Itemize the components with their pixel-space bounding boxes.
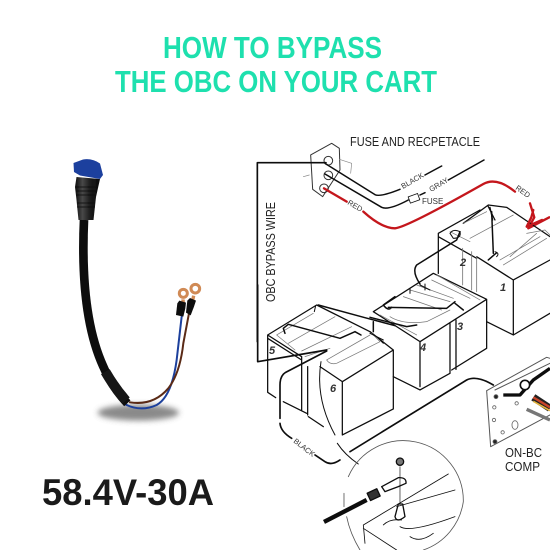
upper wiring [257, 143, 550, 342]
battery numbers: 4 [419, 342, 426, 354]
battery top ribs [380, 212, 550, 335]
ring terminals [176, 284, 200, 317]
battery terminal detail [363, 474, 455, 550]
battery numbers [269, 257, 506, 395]
black wire [325, 163, 442, 195]
wiring diagram [257, 135, 550, 550]
strain relief [105, 372, 126, 401]
detail circle [344, 441, 463, 550]
battery 5 outline [268, 305, 370, 415]
label: on-board computer [505, 446, 542, 474]
battery 1 and 2 back edge [463, 205, 550, 237]
connector [74, 159, 103, 220]
black cable in detail [324, 500, 367, 522]
lead to detail circle end [337, 443, 358, 464]
gray wire with fuse [325, 160, 484, 208]
terminals on battery 6 [314, 306, 383, 343]
computer box holes [492, 395, 518, 444]
lead to detail circle [320, 362, 335, 435]
label: on-board computer: ON-BC [505, 446, 542, 460]
label: red right: RED [514, 183, 532, 200]
diagram small labels [292, 171, 532, 459]
label: gray: GRAY [428, 176, 450, 194]
crimp and ring terminal [367, 458, 406, 520]
batteries 1 to 4 [370, 210, 550, 390]
strap on battery 3 [383, 297, 463, 310]
bypass wire top [257, 163, 326, 342]
black main cable [83, 220, 127, 403]
strap between batteries 1 and 2 [415, 212, 497, 284]
batteries 5 and 6 [258, 285, 395, 435]
lower diagram [280, 357, 550, 550]
black negative wire lower [280, 378, 493, 463]
label: black lower: BLACK [292, 436, 317, 459]
bypass wire bottom [258, 285, 327, 362]
fuse body [408, 193, 420, 203]
connector body [75, 177, 100, 220]
label: red left: RED [346, 198, 365, 214]
battery numbers: 1 [500, 282, 506, 294]
receptacle plate [303, 143, 352, 197]
strap between batteries 5 and 6 [283, 324, 361, 338]
battery 5 and 6 ribs [277, 313, 380, 364]
battery 2 outline [438, 210, 480, 273]
strap from battery 4 to 6 [370, 317, 417, 327]
red wire [324, 182, 549, 228]
battery numbers: 3 [457, 321, 463, 333]
title [115, 30, 437, 99]
terminal posts [410, 230, 498, 293]
red lead arrow [527, 210, 542, 227]
battery 6 outline [308, 332, 393, 435]
voltage label: 58.4V-30A [42, 472, 214, 513]
black negative wire [280, 351, 327, 418]
battery numbers: 2 [459, 257, 466, 269]
label: on-board computer: COMP [505, 460, 540, 474]
label: black: BLACK [400, 171, 425, 191]
connector ribs [76, 187, 97, 207]
battery 3 and 4 outline [373, 273, 487, 390]
connector blue collar [74, 159, 103, 179]
label: fuse and receptacle: FUSE AND RECPETACLE [350, 135, 480, 149]
battery partitions [463, 248, 477, 292]
cable shadow [98, 405, 179, 421]
on-board computer box [487, 357, 550, 447]
battery 1 outline [477, 257, 550, 335]
computer box harness [503, 368, 550, 420]
product photo: bypass cable [74, 159, 200, 421]
battery numbers: 6 [330, 383, 337, 395]
label: OBC bypass wire: OBC BYPASS WIRE [264, 202, 278, 302]
strap from battery 6 to 4 [318, 305, 395, 332]
title: THE OBC ON YOUR CART [115, 64, 437, 99]
battery numbers: 5 [269, 345, 276, 357]
blue and brown wires [123, 313, 189, 408]
title: HOW TO BYPASS [163, 30, 382, 65]
label: fuse: FUSE [422, 197, 443, 206]
